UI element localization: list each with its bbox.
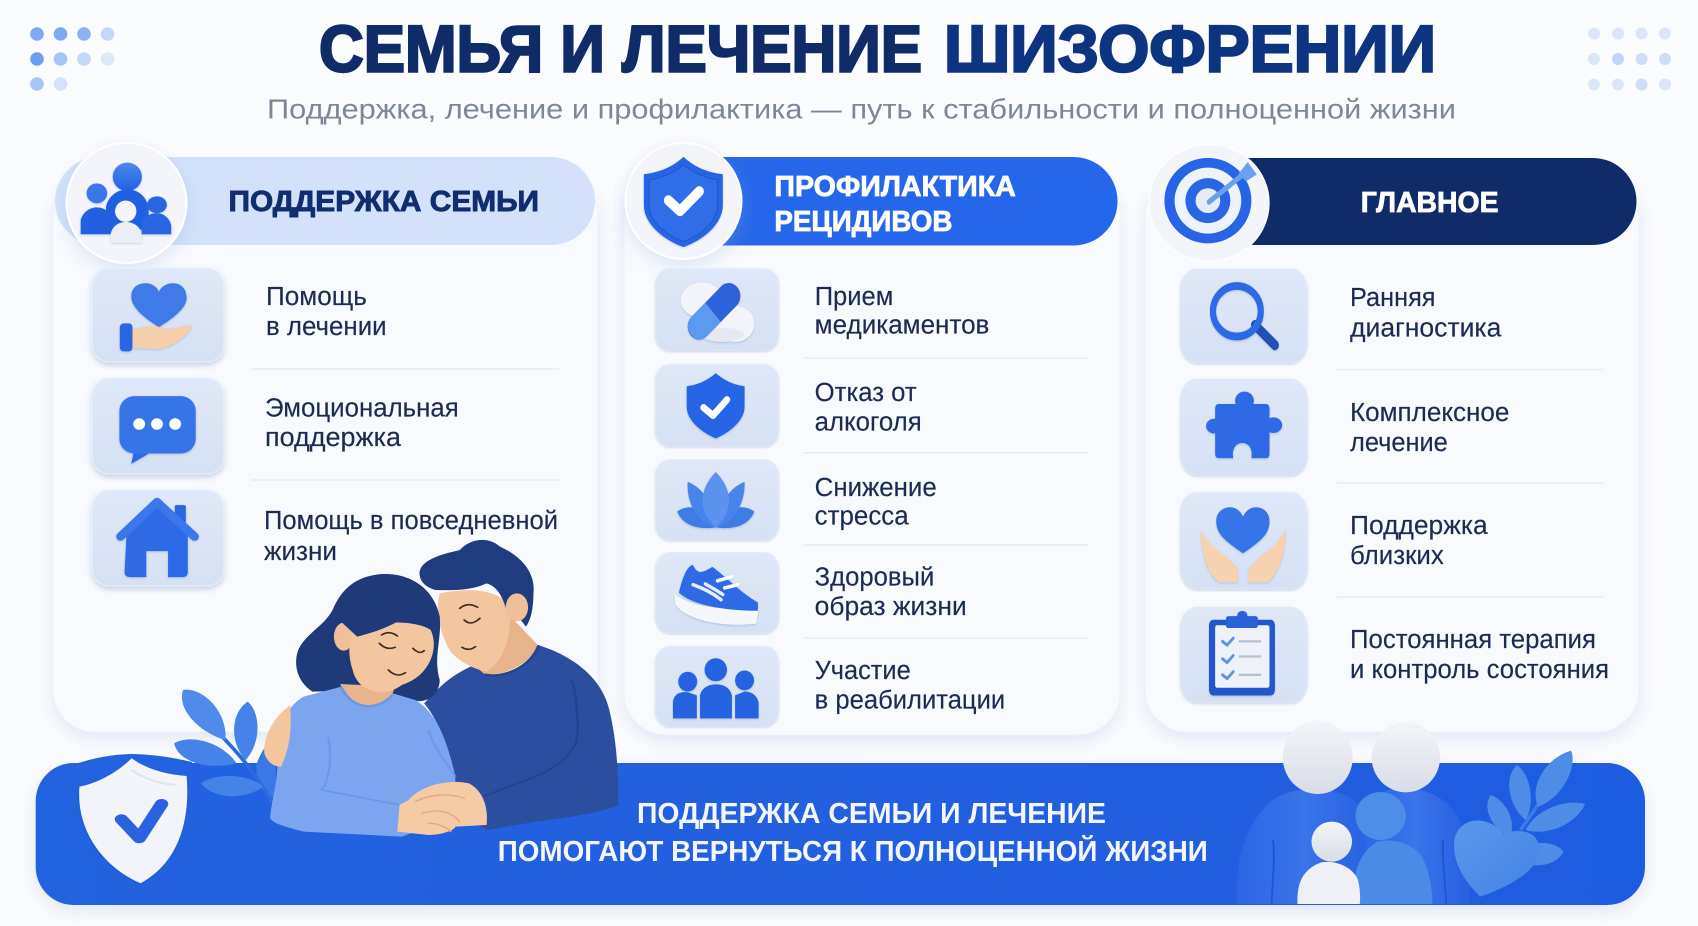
list item icon: clipboard (1180, 607, 1308, 702)
item text: в лечении (266, 313, 387, 341)
item text: комплексное лечение: Комплексное (1350, 399, 1509, 427)
item text: ранняя диагностика (1350, 284, 1502, 342)
banner message: ПОДДЕРЖКА СЕМЬИ И ЛЕЧЕНИЕ (637, 798, 1106, 830)
icon: white shield (79, 758, 187, 883)
icon tile: heart in hand (92, 268, 224, 362)
list item: помощь в повседневной жизни (92, 490, 558, 586)
header bar: профилактика рецидивов (660, 157, 1118, 246)
item text: отказ от алкоголя: Отказ от (815, 379, 917, 407)
panel: профилактика рецидивов (624, 143, 1120, 735)
title (319, 12, 1436, 86)
item text: комплексное лечение: лечение (1350, 429, 1448, 457)
woman face details (379, 633, 424, 675)
man face details (460, 605, 480, 649)
woman bangs (339, 574, 440, 638)
man hand on shoulder (264, 705, 291, 767)
item text: здоровый образ жизни (815, 564, 967, 621)
item text (264, 507, 558, 566)
man sweater (424, 645, 618, 830)
man face (438, 590, 510, 672)
icon: target circle (1149, 145, 1269, 261)
icon: family circle (66, 143, 186, 263)
heading: поддержка семьи: ПОДДЕРЖКА СЕМЬИ (228, 186, 539, 218)
item text: Помощь (266, 283, 367, 311)
title: ШИЗОФРЕНИИ (944, 12, 1436, 86)
item text: снижение стресса: стресса (815, 503, 910, 531)
icon: shield circle (626, 143, 742, 259)
man ear (506, 593, 528, 621)
item text: отказ от алкоголя: алкоголя (815, 408, 922, 436)
list item icon: pills (655, 268, 779, 351)
subtitle: Поддержка, лечение и профилактика — путь к стабильности и полноценной жизни (267, 94, 1456, 124)
title: СЕМЬЯ И ЛЕЧЕНИЕ (319, 12, 922, 86)
woman face (349, 623, 434, 692)
item text: Эмоциональная (265, 394, 459, 422)
item text: комплексное лечение (1350, 399, 1509, 457)
man hair (420, 540, 534, 627)
woman sweater (270, 687, 455, 837)
child white head (1311, 822, 1352, 862)
man neck (464, 610, 538, 674)
arm grooves (1272, 840, 1446, 903)
item text: снижение стресса (815, 474, 937, 531)
list item icon: shield (655, 364, 779, 446)
head left (1283, 721, 1353, 794)
decorative dots: top right (1588, 28, 1671, 90)
head right (1372, 722, 1440, 792)
item text: поддержка (265, 424, 402, 452)
illustration: family with heart (1237, 721, 1585, 904)
banner message: ПОМОГАЮТ ВЕРНУТЬСЯ К ПОЛНОЦЕННОЙ ЖИЗНИ (498, 834, 1208, 868)
icon tile: house (92, 490, 224, 586)
child blue head (1356, 792, 1406, 840)
decorative dots: top left (30, 27, 114, 91)
item text: ранняя диагностика: диагностика (1350, 314, 1502, 342)
list item icon: lotus (655, 459, 779, 540)
item text (265, 394, 459, 452)
panel: главное (1145, 145, 1639, 732)
item text: прием медикаментов (815, 283, 989, 340)
item text: прием медикаментов: Прием (815, 283, 893, 311)
fingers (415, 795, 464, 832)
woman ear (334, 623, 354, 651)
leaves (174, 690, 277, 803)
item text: жизни (264, 538, 337, 566)
item text: здоровый образ жизни: образ жизни (815, 593, 967, 621)
heading: профилактика рецидивов: ПРОФИЛАКТИКА (774, 171, 1016, 203)
banner message (498, 798, 1208, 868)
heading: главное: ГЛАВНОЕ (1361, 187, 1498, 219)
item text: участие в реабилитации: в реабилитации (815, 686, 1005, 714)
bottom banner (36, 754, 1645, 905)
child white body (1297, 862, 1360, 904)
list item: эмоциональная поддержка (92, 378, 459, 474)
second body (1360, 788, 1470, 904)
item text: здоровый образ жизни: Здоровый (815, 564, 934, 592)
item text: снижение стресса: Снижение (815, 474, 937, 502)
item text (266, 283, 387, 341)
panel: поддержка семьи (53, 143, 598, 732)
list item icon: hands and heart (1180, 492, 1308, 589)
heart (1454, 821, 1539, 897)
man collar (484, 645, 539, 675)
item text: постоянная терапия (1350, 626, 1609, 684)
woman sleeve shading (321, 730, 455, 805)
item text: поддержка близких (1350, 512, 1489, 570)
woman neck (340, 684, 395, 705)
leaves (1487, 751, 1585, 865)
list item icon: people group (655, 646, 779, 726)
item text: участие в реабилитации (815, 657, 1005, 714)
list item: помощь в лечении (92, 268, 387, 362)
item text: постоянная терапия: Постоянная терапия (1350, 626, 1596, 654)
list item icon: puzzle (1180, 379, 1308, 475)
item text: поддержка близких: Поддержка (1350, 512, 1489, 540)
item text: постоянная терапия: и контроль состояния (1350, 656, 1609, 684)
list item icon: magnifier (1180, 269, 1308, 363)
item text: поддержка близких: близких (1350, 542, 1444, 570)
item text: прием медикаментов: медикаментов (815, 312, 989, 340)
item text: участие в реабилитации: Участие (815, 657, 911, 685)
illustration: couple with leaves and shield (79, 540, 618, 883)
icon tile: chat bubble (92, 378, 224, 474)
woman hair (296, 574, 440, 701)
man body (1237, 790, 1374, 904)
list item icon: sneaker (655, 552, 779, 633)
header bar: главное (1190, 158, 1636, 245)
header bar: поддержка семьи (55, 157, 595, 245)
item text: Помощь в повседневной (264, 507, 558, 535)
heading: профилактика рецидивов: РЕЦИДИВОВ (774, 206, 952, 238)
item text: ранняя диагностика: Ранняя (1350, 284, 1436, 312)
heading: профилактика рецидивов (774, 171, 1016, 238)
man arm shade (484, 680, 578, 797)
clasped hands (397, 782, 487, 835)
child blue body (1353, 840, 1432, 904)
item text: отказ от алкоголя (815, 379, 922, 436)
woman collar (341, 687, 393, 706)
